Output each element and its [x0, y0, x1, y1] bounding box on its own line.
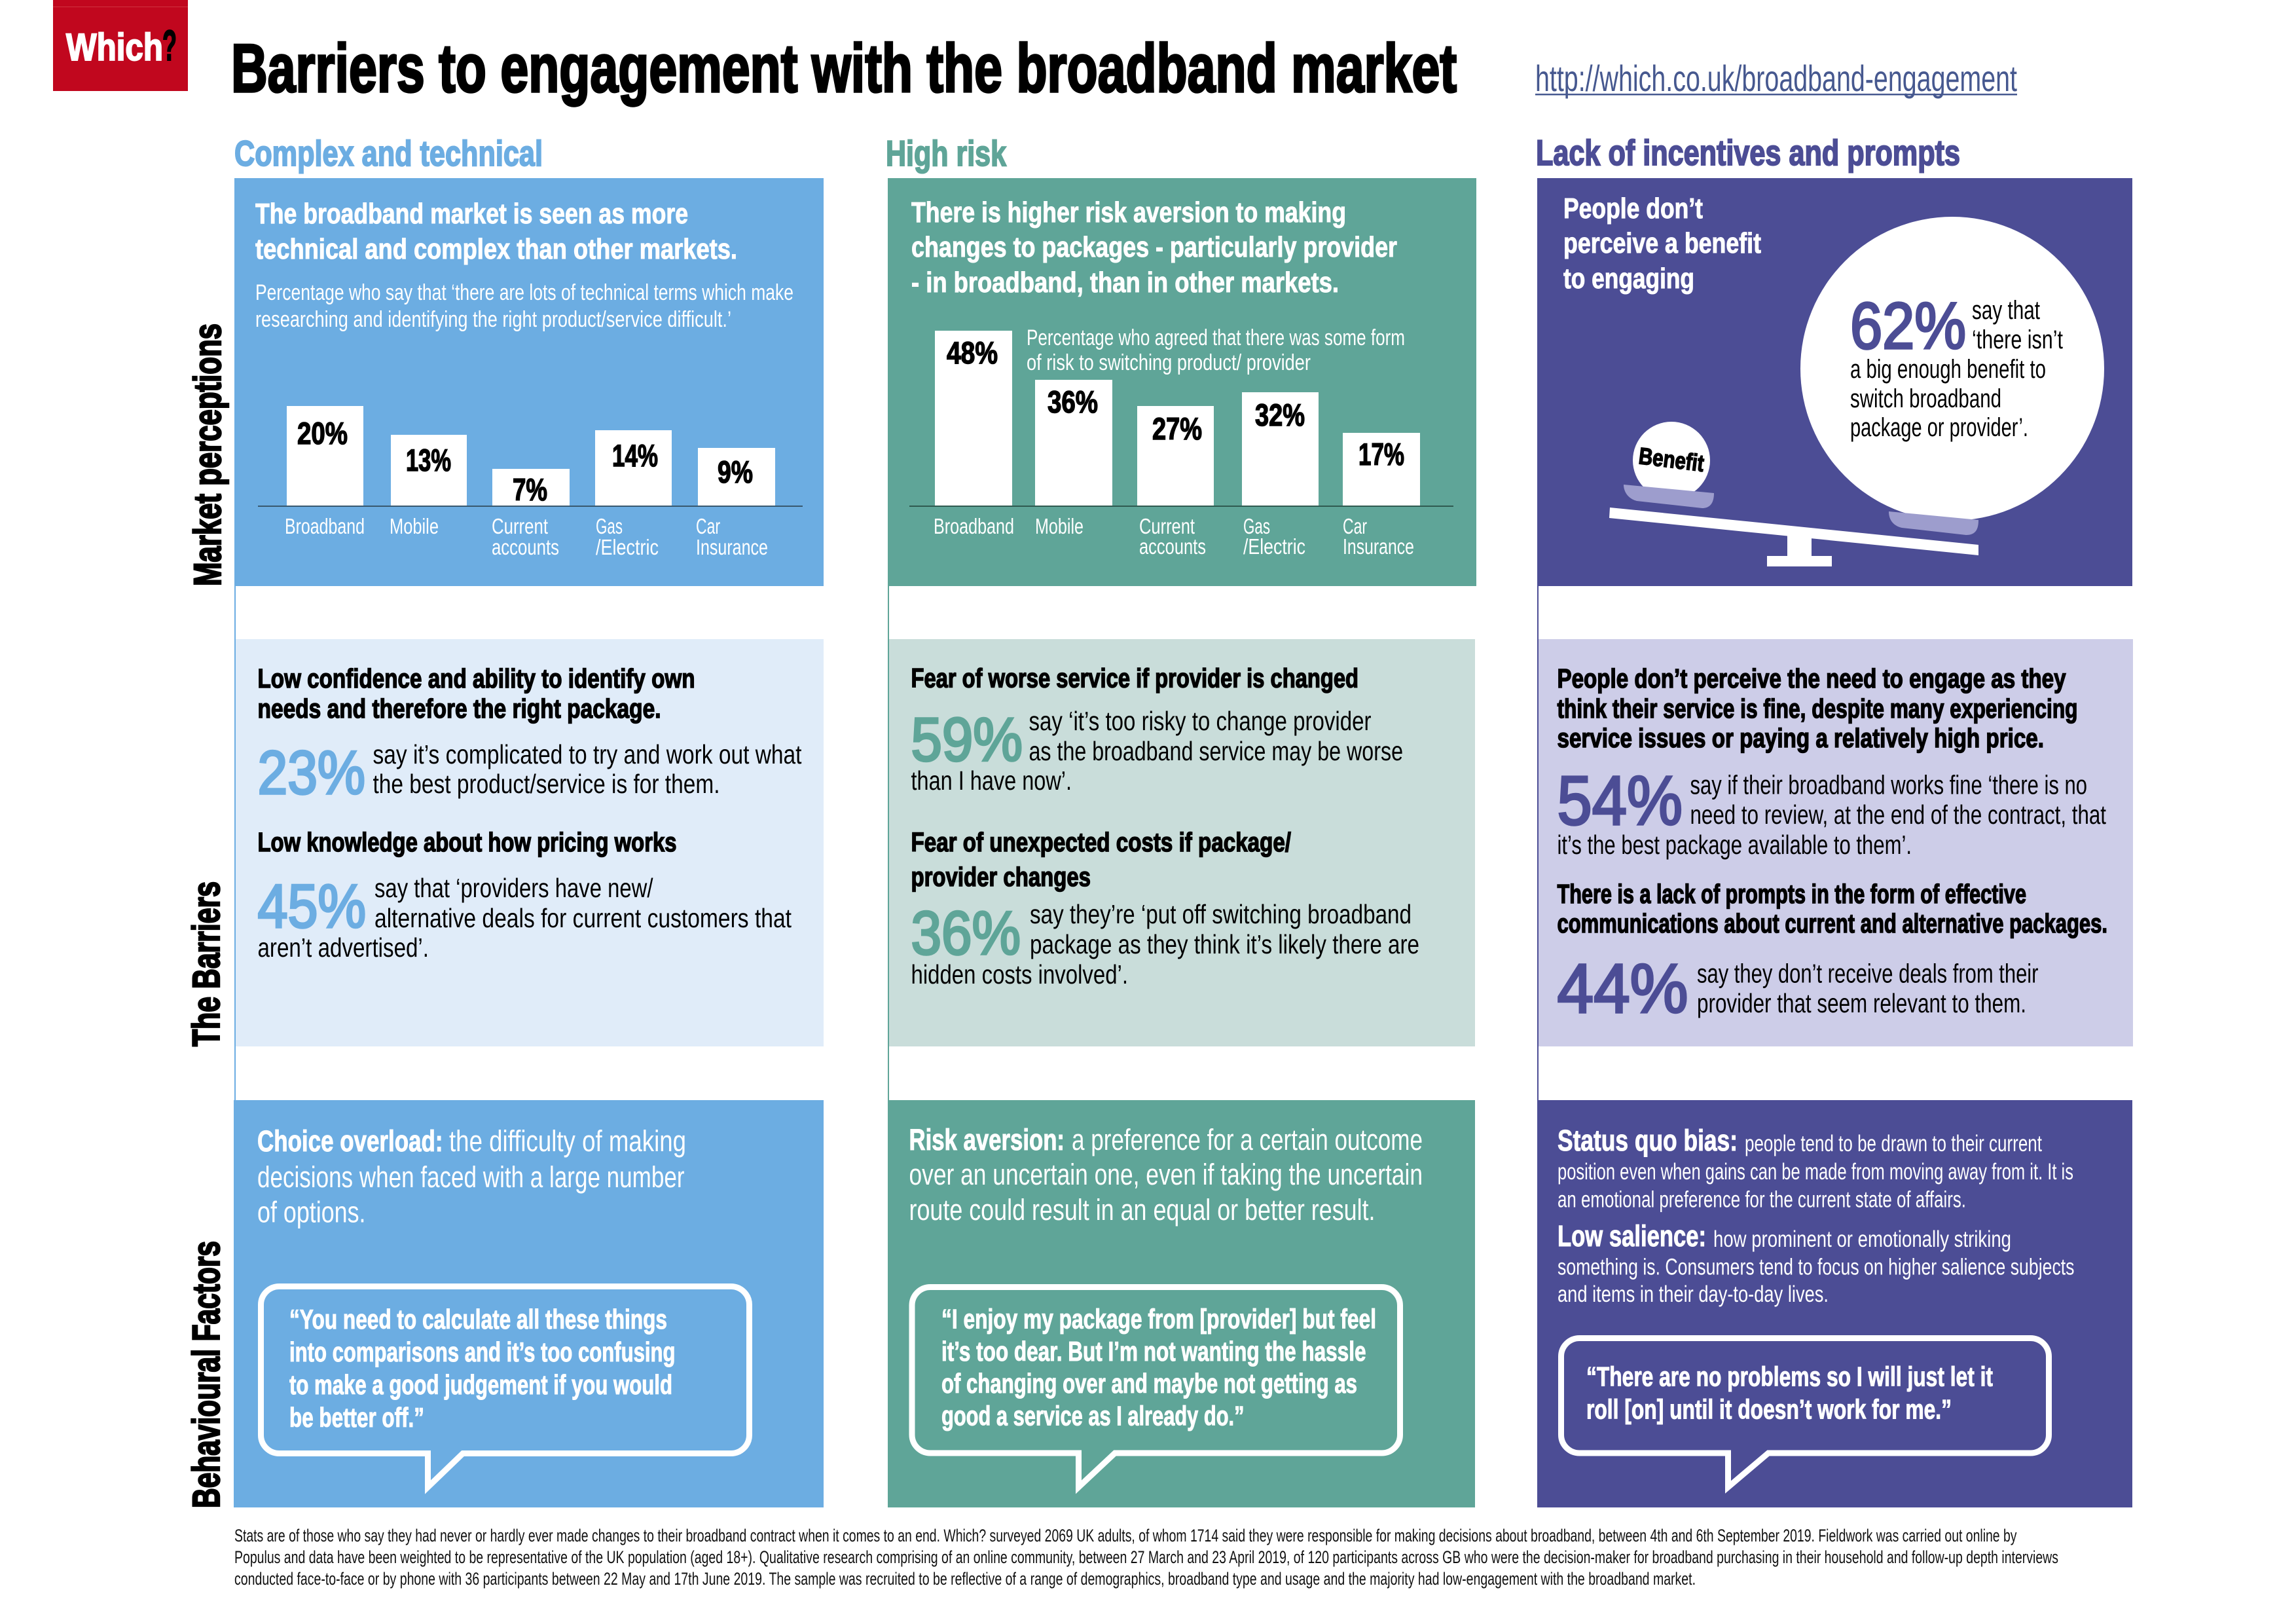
statistic: 54%: say if their broadband works fine ‘there is no: [1690, 770, 2087, 800]
definition: risk aversion: route could result in an equal or better result.: [909, 1193, 1375, 1227]
panel heading: perceive a benefit: [1563, 227, 1761, 259]
definition: choice overload: of options.: [257, 1196, 365, 1228]
definition: status quo bias: position even when gains can be made from moving away from it. It is: [1558, 1159, 2073, 1185]
statistic: 23%: the best product/service is for them.: [373, 769, 720, 799]
panel: high risk barriers: [889, 639, 1475, 1046]
panel heading: There is higher risk aversion to making: [911, 196, 1346, 229]
panel: high risk market perceptions: [888, 178, 1476, 586]
logo: Which?: ?: [162, 21, 177, 69]
statistic: 23%: [258, 738, 802, 807]
definition: risk aversion: [909, 1123, 1423, 1227]
statistic: 23%: 23%: [258, 738, 365, 807]
definition: risk aversion: over an uncertain one, even if taking the uncertain: [909, 1158, 1423, 1191]
chart description: of risk to switching product/ provider: [1027, 350, 1311, 375]
subheading: no perceived need: People don’t perceive the need to engage as they: [1557, 663, 2066, 693]
logo: Which?: Which: [66, 26, 163, 69]
bar chart: risk of switching: 17%: [1358, 437, 1404, 471]
speech bubble: choice overload quote: to make a good judgement if you would: [289, 1369, 672, 1400]
bar chart: risk of switching: Broadband: [934, 514, 1014, 538]
callout: 62% circle on pan: say that: [1972, 296, 2040, 325]
bar chart: technical terms: Current: [492, 514, 548, 538]
definition: status quo bias: Status quo bias:: [1558, 1124, 1738, 1157]
panel heading: The broadband market is seen as more: [255, 198, 688, 230]
footnote: conducted face-to-face or by phone with 36 participants between 22 May and 17th June 2019. The sample was recruited to be reflective of a range of demographics, broadband type and usage and the majority had low-engagement with the broadband market.: [234, 1569, 1696, 1589]
bar chart: risk of switching: Current: [1139, 514, 1195, 538]
definition: low salience: [1558, 1219, 2074, 1307]
chart description: Percentage who agreed that there was some form: [1027, 325, 1405, 350]
bar chart: technical terms: Gas: [596, 514, 623, 538]
statistic: 59%: [911, 705, 1403, 796]
speech bubble: risk aversion quote: “I enjoy my package from [provider] but feel: [941, 1303, 1376, 1335]
title: Barriers to engagement with the broadband market: [231, 31, 1457, 107]
callout: 62% circle on pan: [1800, 217, 2104, 535]
bar chart: risk of switching: Mobile: [1035, 514, 1084, 538]
column heading: Lack of incentives and prompts: Lack of incentives and prompts: [1536, 132, 1960, 173]
speech bubble: choice overload quote: “You need to calculate all these things: [289, 1304, 667, 1335]
speech bubble: risk aversion quote: it’s too dear. But I’m not wanting the hassle: [941, 1336, 1366, 1367]
bar chart: technical terms: Insurance: [696, 535, 768, 559]
speech bubble: choice overload quote: be better off.”: [289, 1402, 424, 1433]
statistic: 45%: say that ‘providers have new/: [374, 873, 653, 903]
panel: lack of incentives barriers: [1539, 639, 2133, 1046]
subheading: lack of prompts: [1557, 879, 2107, 938]
statistic: 54%: need to review, at the end of the contract, that: [1690, 800, 2106, 830]
panel: choice overload: [234, 1100, 824, 1507]
panel heading: changes to packages - particularly provider: [911, 231, 1397, 263]
statistic: 44%: 44%: [1557, 950, 1688, 1027]
bar chart: technical terms: Car: [696, 514, 720, 538]
panel heading: [1563, 193, 1761, 295]
bar chart: technical terms: [258, 406, 803, 559]
bar chart: technical terms: /Electric: [596, 535, 659, 559]
footnote: [234, 1526, 2058, 1589]
row label: Market perceptions: Market perceptions: [187, 323, 229, 586]
callout: 62% circle on pan: ‘there isn’t: [1972, 325, 2063, 354]
panel heading: [911, 196, 1397, 299]
statistic: 36%: hidden costs involved’.: [911, 959, 1128, 989]
subheading: lack of prompts: There is a lack of prompts in the form of effective: [1557, 879, 2026, 909]
bar chart: risk of switching: [909, 331, 1453, 559]
statistic: 36%: say they’re ‘put off switching broadband: [1030, 899, 1412, 929]
callout: 62% circle on pan: package or provider’.: [1850, 413, 2028, 442]
subheading: low confidence: Low confidence and ability to identify own: [258, 663, 695, 693]
bar chart: risk of switching: Car: [1343, 514, 1367, 538]
statistic: 44%: provider that seem relevant to them.: [1697, 988, 2026, 1018]
statistic: 45%: aren’t advertised’.: [258, 932, 429, 963]
panel heading: [255, 198, 737, 265]
speech bubble: status quo quote: roll [on] until it doesn’t work for me.”: [1586, 1393, 1952, 1425]
statistic: 36%: package as they think it’s likely there are: [1030, 929, 1419, 959]
column heading: Complex and technical: Complex and technical: [234, 133, 543, 174]
definition: choice overload: Choice overload:: [257, 1124, 443, 1158]
icon: scales beam and stand: [1609, 507, 1978, 566]
bar chart: technical terms: accounts: [492, 535, 559, 559]
bar chart: technical terms: 14%: [612, 438, 658, 473]
bar chart: technical terms: Broadband: [285, 514, 365, 538]
row label: The Barriers: The Barriers: [185, 881, 228, 1046]
statistic: 45%: alternative deals for current customers that: [374, 903, 792, 933]
panel: complex barriers: [236, 639, 824, 1046]
definition: low salience: how prominent or emotionally striking: [1713, 1227, 2011, 1252]
subheading: fear of unexpected costs: provider changes: [911, 862, 1091, 892]
panel heading: to engaging: [1563, 263, 1694, 295]
bar chart: technical terms: 7%: [513, 472, 547, 507]
definition: status quo bias: [1558, 1124, 2073, 1213]
bar chart: risk of switching: Insurance: [1343, 534, 1414, 559]
subheading: fear of unexpected costs: Fear of unexpected costs if package/: [911, 827, 1291, 857]
bar chart: technical terms: Mobile: [390, 514, 439, 538]
callout: 62% circle on pan: switch broadband: [1850, 384, 2001, 413]
panel heading: - in broadband, than in other markets.: [911, 267, 1339, 299]
speech bubble: risk aversion quote: [912, 1287, 1400, 1487]
column heading: High risk: High risk: [886, 133, 1006, 174]
subheading: low confidence: [258, 663, 695, 724]
subheading: low confidence: needs and therefore the right package.: [258, 693, 661, 724]
definition: risk aversion: a preference for a certain outcome: [1072, 1123, 1423, 1156]
statistic: 45%: [258, 872, 792, 963]
speech bubble: choice overload quote: [261, 1286, 749, 1487]
chart description: researching and identifying the right product/service difficult.’: [255, 307, 731, 332]
statistic: 59%: as the broadband service may be worse: [1029, 736, 1403, 766]
bar chart: risk of switching: 27%: [1152, 411, 1202, 446]
bar chart: technical terms: 13%: [406, 443, 451, 477]
statistic: 59%: say ‘it’s too risky to change provider: [1029, 706, 1371, 736]
subheading: no perceived need: think their service is fine, despite many experiencing: [1557, 693, 2078, 724]
chart description: [255, 280, 793, 332]
speech bubble: status quo quote: [1561, 1338, 2049, 1487]
panel: risk aversion: [888, 1100, 1475, 1507]
statistic: 54%: it’s the best package available to them’.: [1557, 830, 1912, 860]
link: http://which.co.uk/broadband-engagement: [1535, 58, 2017, 99]
definition: risk aversion: Risk aversion:: [909, 1123, 1065, 1156]
definition: choice overload: the difficulty of making: [449, 1124, 686, 1158]
callout: 62% circle on pan: a big enough benefit to: [1850, 355, 2046, 384]
bar chart: risk of switching: Gas: [1243, 514, 1270, 538]
icon: benefit ball on pan: [1624, 422, 1714, 508]
speech bubble: risk aversion quote: of changing over and maybe not getting as: [941, 1368, 1357, 1399]
definition: choice overload: [257, 1124, 686, 1228]
speech bubble: risk aversion quote: good a service as I already do.”: [941, 1400, 1244, 1431]
subheading: no perceived need: [1557, 663, 2078, 753]
icon: benefit ball on pan: Benefit: [1637, 442, 1705, 477]
statistic: 44%: say they don’t receive deals from their: [1697, 959, 2039, 989]
statistic: 45%: 45%: [258, 872, 366, 940]
subheading: no perceived need: service issues or paying a relatively high price.: [1557, 723, 2044, 753]
definition: choice overload: decisions when faced with a large number: [257, 1160, 685, 1194]
definition: low salience: Low salience:: [1558, 1219, 1706, 1253]
statistic: 59%: than I have now’.: [911, 766, 1072, 796]
statistic: 36%: 36%: [911, 898, 1021, 967]
statistic: 44%: [1557, 950, 2039, 1027]
statistic: 54%: 54%: [1557, 762, 1683, 840]
speech bubble: status quo quote: “There are no problems so I will just let it: [1586, 1361, 1993, 1392]
bar chart: risk of switching: 32%: [1255, 397, 1305, 432]
bar chart: technical terms: 20%: [297, 416, 348, 451]
callout: 62% circle on pan: 62%: [1850, 289, 1966, 363]
definition: low salience: something is. Consumers tend to focus on higher salience subjects: [1558, 1255, 2074, 1280]
subheading: fear of worse service: Fear of worse service if provider is changed: [911, 663, 1358, 693]
statistic: 59%: 59%: [911, 705, 1023, 774]
definition: low salience: and items in their day-to-day lives.: [1558, 1282, 1829, 1307]
bar chart: risk of switching: accounts: [1139, 534, 1206, 559]
statistic: 23%: say it’s complicated to try and work out what: [373, 739, 802, 769]
bar chart: risk of switching: 48%: [947, 335, 998, 370]
panel heading: People don’t: [1563, 193, 1703, 225]
statistic: 54%: [1557, 762, 2106, 860]
row label: Behavioural Factors: Behavioural Factors: [185, 1241, 228, 1508]
logo: Which?: [53, 0, 188, 91]
chart description: Percentage who say that ‘there are lots of technical terms which make: [255, 280, 793, 305]
definition: status quo bias: an emotional preference for the current state of affairs.: [1558, 1187, 1966, 1213]
panel: lack of incentives market perceptions: [1537, 178, 2132, 586]
bar chart: risk of switching: 36%: [1048, 384, 1098, 419]
subheading: lack of prompts: communications about current and alternative packages.: [1557, 908, 2107, 938]
panel: complex market perceptions: [234, 178, 824, 586]
bar chart: technical terms: 9%: [718, 454, 753, 489]
definition: status quo bias: people tend to be drawn to their current: [1745, 1131, 2042, 1156]
speech bubble: choice overload quote: into comparisons and it’s too confusing: [289, 1337, 676, 1367]
subheading: fear of unexpected costs: [911, 827, 1291, 892]
bar chart: risk of switching: /Electric: [1243, 534, 1305, 559]
chart description: [1027, 325, 1405, 375]
panel: status quo and salience: [1537, 1100, 2132, 1507]
subheading: low knowledge: Low knowledge about how pricing works: [258, 827, 677, 857]
panel heading: technical and complex than other markets.: [255, 233, 737, 265]
statistic: 36%: [911, 898, 1419, 989]
